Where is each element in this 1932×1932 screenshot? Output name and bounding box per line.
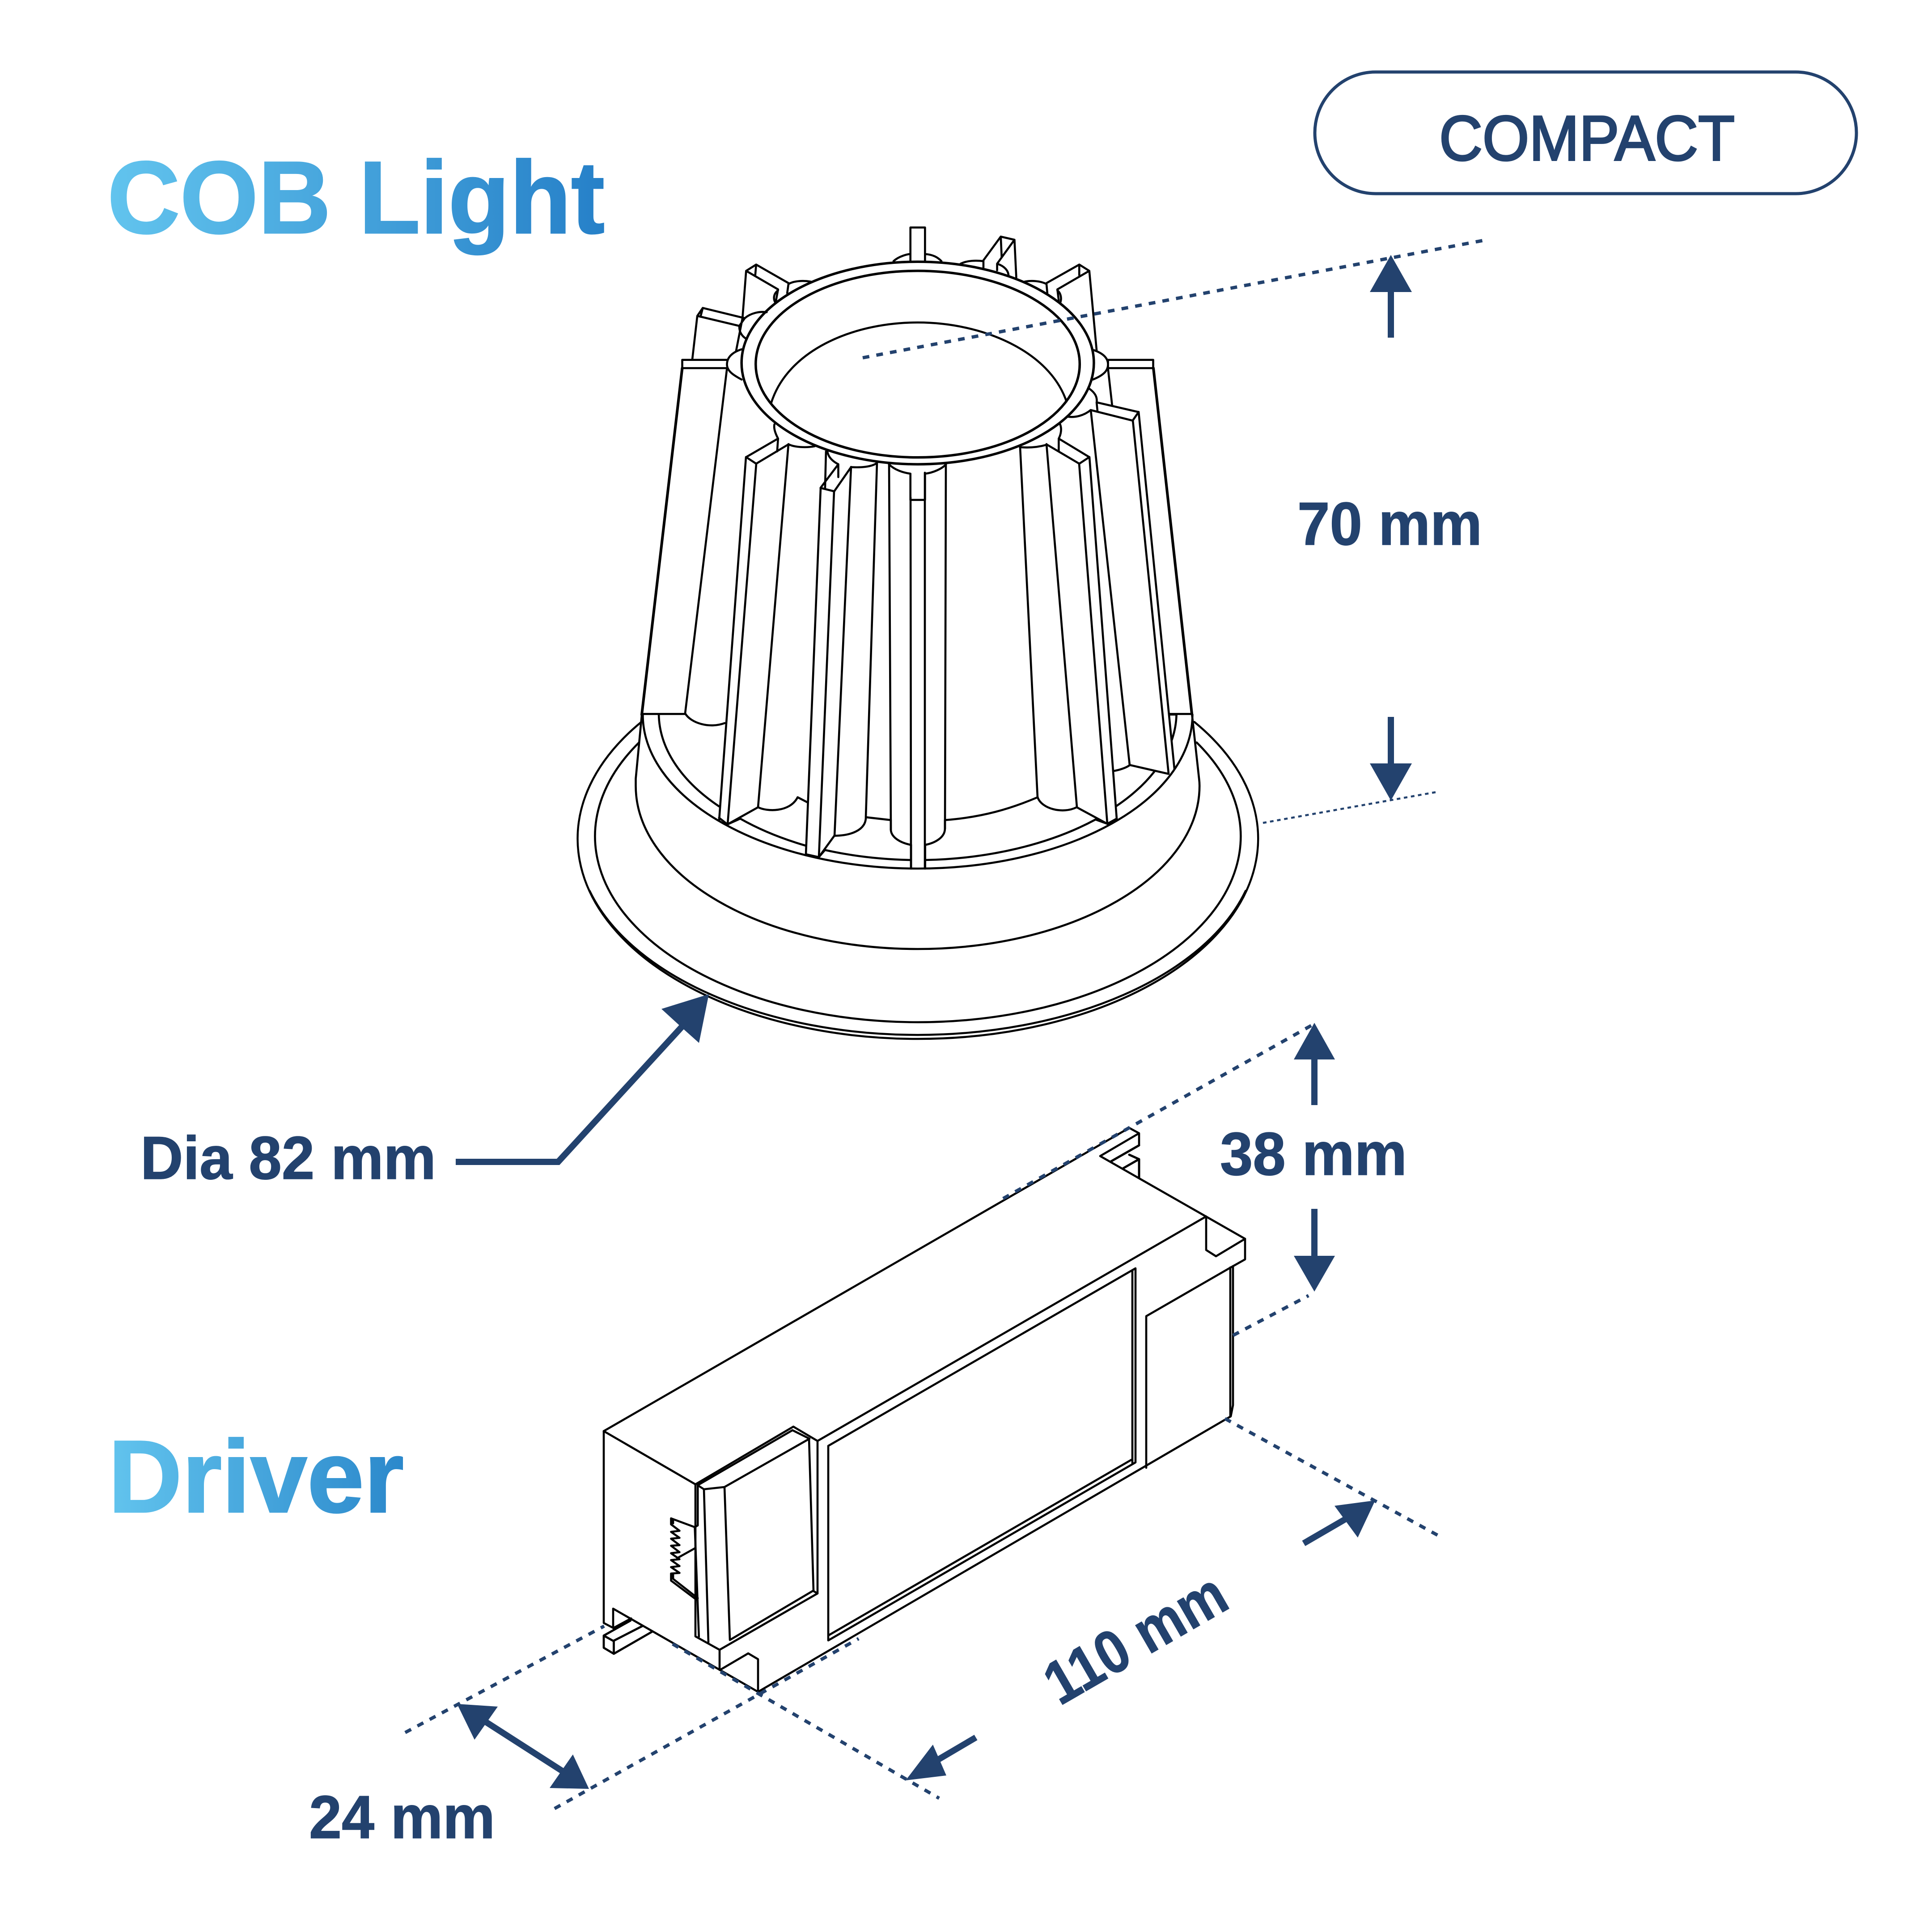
dimension: COB light height 70 mm — [863, 240, 1485, 823]
dimension: driver width 24 mm: 24 mm — [309, 1783, 495, 1851]
dimension: driver length 110 mm — [673, 1419, 1438, 1798]
title: Driver: Driver — [108, 1419, 404, 1534]
illustration: COB light fixture — [578, 228, 1258, 1039]
dimension: COB light height 70 mm: 70 mm — [1297, 490, 1482, 558]
dimension: COB light diameter 82 mm — [140, 994, 709, 1192]
dimension: driver length 110 mm: 110 mm — [1032, 1559, 1238, 1717]
dimension: driver height 38 mm — [1003, 1023, 1407, 1335]
illustration: driver box — [604, 1128, 1245, 1692]
title: COB Light: COB Light — [107, 140, 605, 255]
badge: COMPACT — [1315, 72, 1856, 194]
dimension: COB light diameter 82 mm: Dia 82 mm — [140, 1124, 436, 1192]
dimension: driver height 38 mm: 38 mm — [1220, 1120, 1407, 1188]
badge: COMPACT: COMPACT — [1439, 103, 1735, 174]
dimension: driver width 24 mm — [309, 1626, 859, 1851]
